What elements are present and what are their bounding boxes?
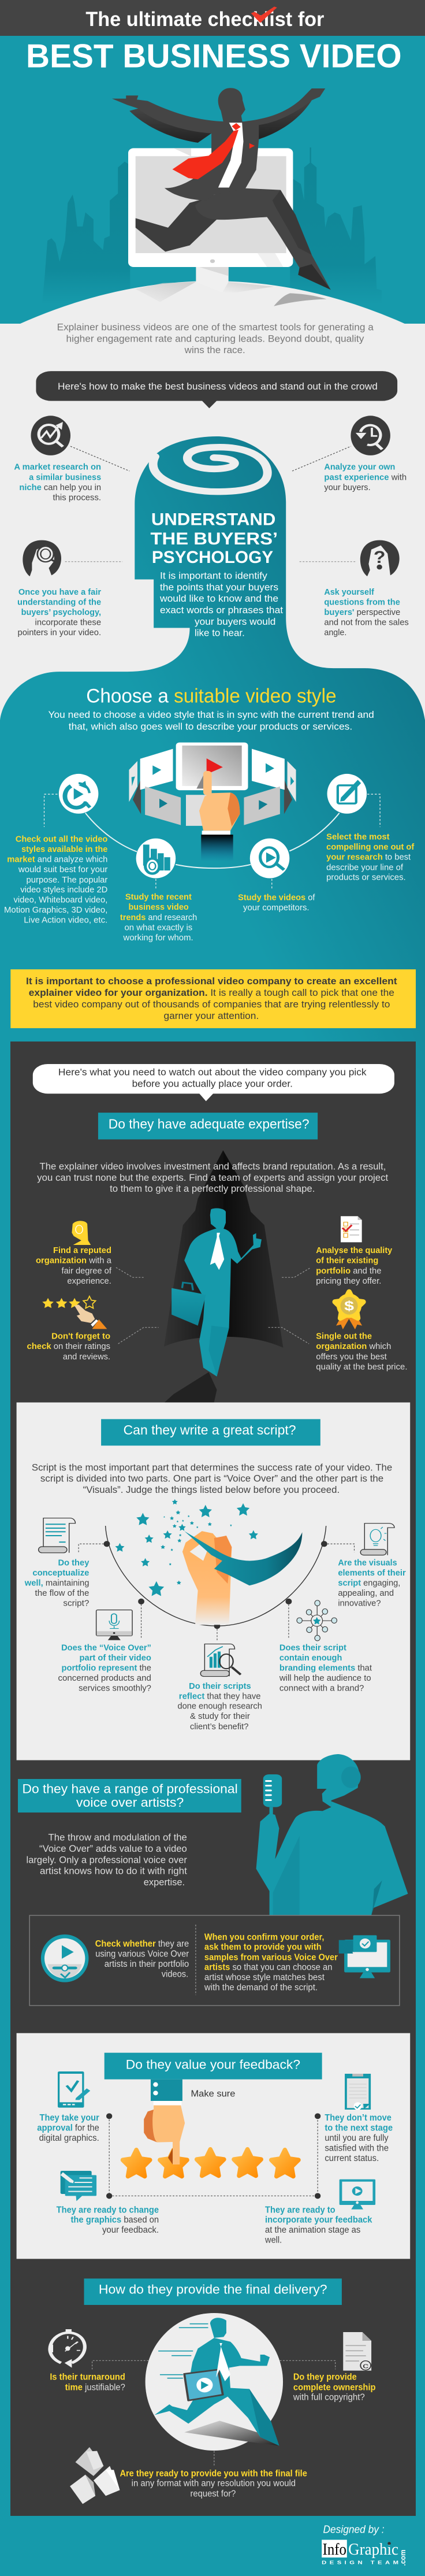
connectors bbox=[65, 446, 357, 562]
text: conceptualize: well, maintaining bbox=[24, 1578, 89, 1588]
icon: past experience clock bbox=[351, 416, 390, 455]
text: check out all the video styles: video, Whiteboard video, bbox=[13, 895, 107, 905]
text: when you confirm: artist whose style matches best bbox=[204, 1972, 325, 1982]
text: branding elements: connect with a brand? bbox=[279, 1684, 364, 1693]
text: check out all the video styles: Check out all the video bbox=[16, 834, 107, 844]
icon: script scroll bbox=[39, 1518, 75, 1553]
section: choose a suitable video style bbox=[4, 685, 416, 1028]
spotlight shape bbox=[152, 1150, 284, 1414]
illustration: running man in oval bbox=[146, 2313, 283, 2451]
panel: great script bbox=[17, 1402, 410, 1760]
text: study the recent trends: on what exactly is bbox=[124, 922, 192, 932]
text: study the recent trends bbox=[120, 892, 197, 943]
text: past experience: Analyze your own bbox=[324, 462, 395, 472]
text: conceptualize: Do they bbox=[58, 1558, 90, 1567]
section: adequate expertise bbox=[27, 1064, 407, 1414]
text: voice over paragraph: The throw and modulation of the bbox=[49, 1833, 187, 1843]
text: take your approval: approval for the bbox=[37, 2122, 99, 2133]
text: turnaround time bbox=[50, 2372, 125, 2392]
text: voice over portfolio: concerned products and bbox=[58, 1673, 151, 1683]
heading: choose a suitable video style: Choose a suitable video style bbox=[86, 685, 337, 707]
text: psychology paragraph bbox=[159, 570, 284, 639]
illustration: tablet with video panels and hand bbox=[129, 743, 296, 862]
callout: yellow box: explainer video for your organization. It is really a tough call to pick that one the bbox=[29, 987, 394, 998]
text: video style intro bbox=[49, 709, 374, 732]
icon: monitor with play bbox=[340, 2180, 375, 2210]
footer credit: designed by: Designed by : bbox=[323, 2523, 385, 2536]
icon: video search bbox=[59, 774, 98, 814]
text: analyse portfolio: of their existing bbox=[316, 1255, 378, 1265]
icon: market research bbox=[31, 416, 70, 455]
text: final file: in any format with any resolution you would bbox=[132, 2478, 296, 2488]
text: next stage: They don’t move bbox=[325, 2112, 392, 2122]
text: when you confirm: ask them to provide you with bbox=[204, 1942, 322, 1952]
text: select the most compelling: describe your line of bbox=[326, 862, 403, 872]
text: branding elements: will help the audience to bbox=[279, 1673, 371, 1683]
text: conceptualize: conceptualize bbox=[32, 1568, 89, 1577]
icon: head with magnifier bbox=[23, 540, 61, 576]
text: incorporate pointers: understanding of the bbox=[17, 597, 101, 607]
text: check whether: using various Voice Over bbox=[95, 1948, 189, 1959]
text: incorporate feedback: well. bbox=[264, 2235, 282, 2245]
text: study the recent trends: trends and research bbox=[120, 912, 197, 922]
text: complete ownership: with full copyright? bbox=[293, 2392, 365, 2402]
footer logo: infographic design team bbox=[322, 2540, 407, 2566]
text: scripts reflect research: & study for their bbox=[190, 1711, 250, 1721]
text: market research: A market research on bbox=[14, 462, 101, 472]
intro text: wins the race. bbox=[184, 344, 245, 355]
icon: medal bbox=[335, 1292, 363, 1329]
panel: voice over tips bbox=[29, 1915, 400, 2006]
text: branding elements bbox=[279, 1643, 372, 1693]
text: single out the organization: quality at the best price. bbox=[316, 1362, 407, 1372]
text: study competitors: your competitors. bbox=[243, 903, 310, 913]
icon: stopwatch bbox=[49, 2329, 85, 2368]
text: turnaround time: time justifiable? bbox=[65, 2382, 125, 2392]
text: visual elements: script engaging, bbox=[338, 1578, 400, 1588]
text: scripts reflect research: Do their scripts bbox=[189, 1681, 251, 1691]
text: next stage bbox=[325, 2112, 393, 2163]
text: past experience: past experience with bbox=[324, 472, 407, 482]
heading: great script bbox=[101, 1419, 320, 1445]
city skyline bbox=[42, 147, 382, 305]
text: change the graphics bbox=[57, 2204, 159, 2234]
text: expertise paragraph: to them to give it a perfectly professional shape. bbox=[110, 1183, 315, 1194]
text: next stage: satisfied with the bbox=[325, 2143, 389, 2153]
text: reputed organization: organization with a bbox=[36, 1255, 112, 1265]
text: check out all the video styles: Motion Graphics, 3D video, bbox=[4, 905, 107, 914]
monitor bbox=[128, 148, 293, 292]
text: psychology paragraph: would like to know and the bbox=[159, 594, 278, 604]
heading: great script: Can they write a great script? bbox=[124, 1423, 296, 1438]
icon: scroll with chart and magnifier bbox=[200, 1644, 241, 1677]
text: reputed organization: fair degree of bbox=[62, 1266, 111, 1276]
hill bbox=[0, 281, 425, 370]
text: visual elements: appealing, and bbox=[338, 1588, 394, 1598]
icon: medal: $ bbox=[344, 1299, 354, 1314]
text: make sure: Make sure bbox=[191, 2088, 235, 2099]
arc with nodes bbox=[79, 1526, 354, 1641]
text: voice over portfolio: portfolio represent the bbox=[62, 1663, 151, 1673]
text: psychology paragraph: like to hear. bbox=[195, 628, 245, 639]
callout: yellow box bbox=[10, 969, 416, 1028]
text: study the recent trends: business video bbox=[128, 902, 189, 912]
intro text: higher engagement rate and capturing leads. Beyond doubt, quality bbox=[66, 333, 364, 344]
icon: head with question mark: ? bbox=[374, 547, 385, 567]
text: market research bbox=[14, 462, 101, 502]
footer logo: infographic design team: .com bbox=[399, 2549, 407, 2566]
text: psychology paragraph: your buyers would bbox=[195, 617, 275, 627]
text: turnaround time: Is their turnaround bbox=[50, 2372, 125, 2382]
heading: understand the buyers' psychology: PSYCHOLOGY bbox=[152, 547, 273, 567]
text: complete ownership: Do they provide bbox=[293, 2372, 357, 2382]
text: expertise paragraph bbox=[37, 1161, 389, 1194]
text: voice over paragraph bbox=[27, 1833, 187, 1888]
speech bubble: what to watch out: Here's what you need to watch out about the video company you pick bbox=[58, 1066, 367, 1077]
text: change the graphics: your feedback. bbox=[102, 2225, 159, 2234]
text: market research: this process. bbox=[53, 492, 101, 502]
text: final file: request for? bbox=[191, 2488, 236, 2499]
section: understand the buyers' psychology bbox=[0, 371, 425, 1387]
header bar bbox=[0, 0, 425, 36]
text: check out all the video styles: video styles include 2D bbox=[20, 885, 107, 895]
text: analyse portfolio: Analyse the quality bbox=[316, 1246, 393, 1255]
intro text: Explainer business videos are one of the smartest tools for generating a bbox=[57, 322, 374, 332]
text: study competitors: Study the videos of bbox=[238, 892, 315, 902]
callout: yellow box: garner your attention. bbox=[164, 1010, 259, 1021]
text: scripts reflect research: done enough research bbox=[177, 1702, 262, 1711]
speech bubble bbox=[36, 371, 397, 408]
icon: copyright document bbox=[343, 2332, 371, 2371]
icon: head with question mark bbox=[360, 540, 400, 576]
text: check ratings and reviews: and reviews. bbox=[63, 1351, 110, 1361]
text: incorporate feedback: They are ready to bbox=[265, 2204, 335, 2215]
text: select the most compelling: products or services. bbox=[326, 872, 406, 882]
text: when you confirm bbox=[204, 1932, 338, 1992]
icon: yellow head with bulb bbox=[72, 1221, 91, 1245]
heading: understand the buyers' psychology: THE BUYERS’ bbox=[151, 529, 278, 548]
text: complete ownership: complete ownership bbox=[293, 2382, 376, 2392]
illustration: hand with feather bbox=[182, 1531, 302, 1625]
heading: understand the buyers' psychology: UNDERSTAND bbox=[151, 510, 275, 529]
icon: monitor with speech bubbles bbox=[339, 1935, 390, 1978]
text: voice over portfolio: part of their video bbox=[80, 1653, 151, 1663]
teal head and shoulders shape bbox=[0, 436, 425, 1387]
text: psychology paragraph: It is important to identify bbox=[160, 570, 267, 581]
icon: star rating and hand bbox=[42, 1296, 107, 1329]
text: when you confirm: samples from various Voice Over bbox=[204, 1952, 338, 1962]
heading: adequate expertise: Do they have adequate expertise? bbox=[109, 1117, 310, 1132]
text: next stage: until you are fully bbox=[325, 2133, 389, 2143]
text: final file bbox=[120, 2468, 307, 2499]
text: incorporate feedback bbox=[264, 2204, 372, 2245]
text: conceptualize: the flow of the bbox=[35, 1588, 89, 1598]
text: study the recent trends: working for whom. bbox=[123, 933, 193, 943]
icon: checklist document bbox=[341, 1216, 362, 1242]
text: ask yourself questions: buyers' perspective bbox=[324, 607, 400, 617]
icon: monitor with microphone bbox=[96, 1610, 132, 1640]
text: market research: a similar business bbox=[29, 472, 101, 482]
text: visual elements: innovative? bbox=[338, 1599, 381, 1608]
text: voice over paragraph: largely. Only a professional voice over bbox=[27, 1855, 187, 1865]
panel: dark checklist bbox=[10, 1041, 416, 2516]
heading: value your feedback: Do they value your feedback? bbox=[126, 2058, 300, 2071]
text: analyse portfolio: pricing they offer. bbox=[316, 1276, 381, 1285]
text: check out all the video styles: market and analyze which bbox=[7, 854, 107, 864]
text: psychology paragraph: the points that your buyers bbox=[160, 582, 278, 593]
footer logo: infographic design team: DESIGN TEAM bbox=[322, 2560, 398, 2566]
text: scripts reflect research: reflect that they have bbox=[179, 1692, 261, 1701]
text: visual elements: elements of their bbox=[338, 1568, 406, 1577]
dashed frame with nodes bbox=[106, 2113, 320, 2199]
text: incorporate feedback: at the animation stage as bbox=[265, 2225, 360, 2234]
text: video style intro: that, which also goes well to describe your products or services. bbox=[69, 721, 352, 732]
text: when you confirm: artists so that you can choose an bbox=[204, 1962, 332, 1972]
text: reputed organization: experience. bbox=[67, 1276, 111, 1285]
text: conceptualize bbox=[24, 1558, 90, 1608]
text: market research: niche can help you in bbox=[19, 482, 101, 492]
text: ask yourself questions bbox=[324, 587, 409, 637]
heading: value your feedback bbox=[105, 2053, 322, 2080]
panel: feedback bbox=[17, 2033, 410, 2259]
icon: trends bar chart bbox=[136, 839, 176, 879]
icon: magnifier with play bbox=[250, 839, 289, 879]
footer logo: infographic design team: Graphic bbox=[348, 2541, 398, 2559]
heading: final delivery bbox=[84, 2278, 342, 2305]
text: check out all the video styles: Live Action video, etc. bbox=[24, 915, 107, 925]
connectors bbox=[116, 1267, 311, 1344]
icon: tablet with check bbox=[58, 2071, 90, 2108]
text: conceptualize: script? bbox=[63, 1599, 89, 1608]
text: script paragraph bbox=[32, 1462, 392, 1495]
text: take your approval: They take your bbox=[40, 2112, 99, 2122]
text: when you confirm: with the demand of the script. bbox=[204, 1982, 318, 1992]
text: analyse portfolio bbox=[316, 1246, 393, 1285]
hill shadows bbox=[136, 282, 327, 306]
text: check ratings and reviews: Don't forget to bbox=[51, 1331, 110, 1341]
five orange stars bbox=[122, 2149, 299, 2176]
text: final file: Are they ready to provide you with the final file bbox=[120, 2468, 307, 2478]
icon: red check mark bbox=[251, 6, 277, 23]
text: psychology paragraph: exact words or phrases that bbox=[160, 605, 284, 616]
businessman figure bbox=[112, 88, 331, 290]
text: single out the organization bbox=[316, 1331, 407, 1372]
text: select the most compelling: Select the most bbox=[326, 832, 390, 842]
text: reputed organization bbox=[36, 1246, 112, 1285]
text: voice over paragraph: “Voice Over” adds value to a video bbox=[39, 1844, 187, 1854]
text: check whether: Check whether they are bbox=[95, 1939, 189, 1948]
text: change the graphics: the graphics based on bbox=[71, 2215, 159, 2225]
icon: chat with pen bbox=[61, 2171, 96, 2201]
text: check out all the video styles bbox=[4, 834, 108, 925]
icon: visuals scroll with bulb bbox=[360, 1524, 394, 1555]
text: check whether: artists in their portfolio bbox=[105, 1959, 189, 1969]
text: voice over portfolio: Does the “Voice Over” bbox=[61, 1643, 151, 1652]
text: visual elements bbox=[338, 1558, 406, 1608]
text: take your approval: digital graphics. bbox=[39, 2133, 99, 2143]
text: scripts reflect research bbox=[177, 1681, 262, 1732]
text: single out the organization: Single out the bbox=[316, 1331, 372, 1341]
text: incorporate pointers: Once you have a fair bbox=[18, 587, 101, 596]
speech bubble: what to watch out bbox=[33, 1064, 394, 1101]
text: check whether: videos. bbox=[162, 1969, 188, 1979]
stars bbox=[115, 1499, 258, 1596]
section: great script bbox=[24, 1419, 406, 1732]
text: scripts reflect research: client’s benefit? bbox=[190, 1722, 248, 1732]
text: incorporate feedback: incorporate your feedback bbox=[265, 2215, 372, 2225]
icon: play badge bbox=[41, 1934, 88, 1982]
text: study competitors bbox=[238, 892, 315, 913]
text: past experience bbox=[324, 462, 407, 492]
text: check ratings and reviews bbox=[27, 1331, 110, 1361]
text: reputed organization: Find a reputed bbox=[53, 1246, 111, 1255]
heading: adequate expertise bbox=[98, 1113, 318, 1139]
text: check out all the video styles: purpose. The popular bbox=[27, 874, 108, 884]
connecting arcs bbox=[44, 794, 380, 890]
icon: checkbox and pencil bbox=[327, 774, 367, 814]
heading: voice over artists: voice over artists? bbox=[76, 1795, 184, 1810]
text: study the recent trends: Study the recent bbox=[125, 892, 192, 902]
text: when you confirm: When you confirm your order, bbox=[204, 1932, 324, 1942]
text: voice over portfolio bbox=[58, 1643, 151, 1693]
icon: network of people bbox=[297, 1600, 337, 1641]
figure: voice artist with microphone bbox=[256, 1754, 408, 1915]
footer logo: infographic design team: Info bbox=[323, 2541, 346, 2559]
text: ask yourself questions: questions from the bbox=[324, 597, 400, 607]
heading: voice over artists bbox=[18, 1779, 241, 1813]
text: visual elements: Are the visuals bbox=[338, 1558, 397, 1567]
text: check out all the video styles: styles available in the bbox=[21, 844, 107, 854]
text: select the most compelling: your research to best bbox=[326, 852, 411, 862]
section: hero bbox=[0, 6, 425, 370]
section: voice over artists bbox=[18, 1754, 408, 2006]
hand pointing to star bbox=[144, 2080, 185, 2164]
text: check out all the video styles: would suit best for your bbox=[18, 865, 108, 874]
icon: copyright document: c bbox=[363, 2362, 369, 2370]
text: ask yourself questions: Ask yourself bbox=[324, 587, 374, 596]
text: incorporate pointers: incorporate these bbox=[35, 617, 101, 627]
text: ask yourself questions: angle. bbox=[324, 627, 346, 637]
text: branding elements: contain enough bbox=[279, 1653, 342, 1663]
heading: voice over artists: Do they have a range of professional bbox=[22, 1782, 238, 1796]
text: analyse portfolio: portfolio and the bbox=[316, 1266, 381, 1276]
text: check whether bbox=[95, 1939, 189, 1979]
text: next stage: to the next stage bbox=[325, 2122, 393, 2133]
text: incorporate pointers: buyers’ psychology, bbox=[21, 607, 101, 617]
spiral bbox=[153, 447, 267, 492]
text: branding elements: branding elements that bbox=[279, 1663, 372, 1673]
heading: final delivery: How do they provide the final delivery? bbox=[99, 2282, 327, 2297]
text: take your approval bbox=[37, 2112, 99, 2143]
microphone bars bbox=[265, 1780, 272, 1801]
text: check ratings and reviews: check on their ratings bbox=[27, 1341, 110, 1351]
text: voice over paragraph: expertise. bbox=[144, 1877, 185, 1888]
text: single out the organization: offers you the best bbox=[316, 1351, 387, 1361]
text: change the graphics: They are ready to change bbox=[57, 2204, 159, 2215]
icon: folders bbox=[70, 2447, 120, 2504]
text: select the most compelling bbox=[326, 832, 415, 882]
text: next stage: current status. bbox=[325, 2153, 379, 2163]
text: incorporate pointers: pointers in your video. bbox=[18, 627, 101, 637]
text: past experience: your buyers. bbox=[324, 482, 371, 492]
figure: businessman with briefcase bbox=[172, 1209, 262, 1377]
section: final delivery bbox=[49, 2313, 407, 2566]
light background band bbox=[0, 324, 425, 728]
text: branding elements: Does their script bbox=[279, 1643, 346, 1652]
intro text bbox=[57, 322, 374, 355]
text: single out the organization: organization which bbox=[316, 1341, 391, 1351]
heading: understand the buyers' psychology bbox=[151, 510, 278, 567]
text: complete ownership bbox=[293, 2372, 376, 2402]
title: the ultimate checklist for: The ultimate checklist for bbox=[85, 8, 325, 31]
text: script paragraph: “Visuals”. Judge the things listed below before you proceed. bbox=[83, 1484, 340, 1495]
text: voice over paragraph: artist knows how to do it with right bbox=[40, 1866, 187, 1877]
icon: clipboard bbox=[345, 2074, 371, 2110]
text: incorporate pointers bbox=[17, 587, 101, 637]
connectors bbox=[92, 2360, 335, 2466]
text: voice over portfolio: services smoothly? bbox=[79, 1684, 151, 1693]
speech bubble: what to watch out: before you actually place your order. bbox=[132, 1078, 293, 1089]
section: value your feedback bbox=[37, 2053, 393, 2305]
